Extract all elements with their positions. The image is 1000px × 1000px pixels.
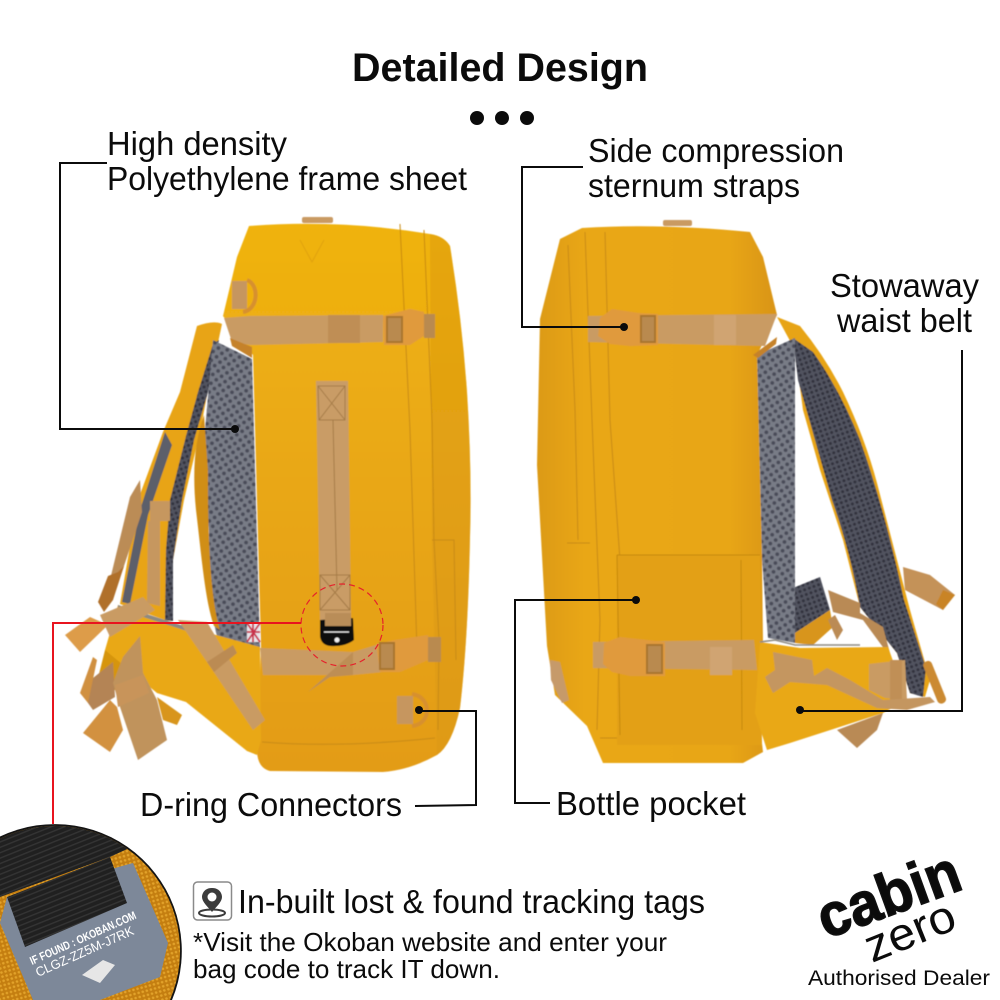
leader: sternum straps — [522, 167, 628, 331]
logo: cabin zero: cabin — [808, 838, 970, 951]
circular tracking tag close-up — [0, 824, 184, 1000]
label: sternum straps — [588, 132, 844, 204]
leader: d-ring — [415, 706, 476, 806]
stowed waist belt left — [65, 597, 265, 760]
back panel mesh left — [204, 340, 260, 650]
bottle pocket — [617, 555, 762, 745]
logo: cabin zero: zero — [856, 889, 963, 972]
upper buckle — [65, 617, 108, 652]
back label tag — [550, 660, 569, 703]
top carry tab right — [663, 220, 692, 226]
text: okoban instructions: *Visit the Okoban website and enter your — [193, 927, 667, 957]
icon: location pin in rounded frame — [194, 882, 232, 920]
lower buckle right — [603, 637, 665, 676]
back pad under strap right — [793, 577, 890, 748]
text: authorised dealer: Authorised Dealer — [808, 967, 990, 990]
back panel mesh right — [757, 338, 795, 643]
label: waist belt — [830, 267, 979, 339]
label: sternum straps: sternum straps — [588, 167, 800, 204]
shoulder side tab — [903, 567, 955, 610]
heading: lost and found: In-built lost & found tracking tags — [238, 883, 705, 920]
text: okoban instructions: bag code to track IT down. — [193, 954, 500, 984]
circular tracking tag close-up: CLGZ-ZZ5M-J7RK — [33, 923, 136, 980]
stowed waist belt right — [755, 640, 935, 750]
back strap and buckle — [88, 662, 115, 710]
leader: waist belt — [796, 350, 962, 714]
tracking tag black left — [320, 613, 354, 646]
label: waist belt: Stowaway — [830, 267, 979, 304]
top buckle right — [598, 309, 658, 346]
label: frame sheet: High density — [107, 125, 287, 162]
main body right — [537, 226, 777, 763]
label: waist belt: waist belt — [836, 302, 972, 339]
leader: bottle pocket — [515, 596, 640, 803]
lower compression strap left — [260, 635, 441, 692]
left backpack side view — [65, 217, 471, 772]
d-ring lower left — [397, 694, 427, 726]
wide strap — [178, 620, 265, 730]
label: frame sheet: Polyethylene frame sheet — [107, 160, 467, 197]
red connector line to tracking tag — [53, 623, 301, 824]
black strap — [7, 857, 127, 947]
dashed red highlight circle — [301, 584, 383, 666]
text: okoban instructions — [193, 927, 667, 984]
okoban diamond logo — [82, 960, 115, 983]
lower buckle left — [376, 635, 428, 672]
lower compression strap right — [593, 637, 757, 676]
top compression strap right — [588, 309, 777, 358]
main body left — [223, 224, 471, 772]
vertical handle left — [316, 381, 351, 620]
label: sternum straps: Side compression — [588, 132, 844, 169]
uk flag label — [247, 623, 260, 642]
right backpack side view — [537, 220, 955, 763]
title: Detailed Design — [352, 46, 648, 90]
label: d-ring: D-ring Connectors — [140, 786, 402, 823]
decorative three dots — [470, 111, 534, 125]
top carry tab left — [302, 217, 333, 223]
label: frame sheet — [107, 125, 467, 197]
label: bottle pocket: Bottle pocket — [556, 785, 746, 822]
d-ring upper left — [232, 280, 256, 312]
grey tag — [0, 863, 168, 1000]
leader: frame sheet — [60, 163, 239, 433]
lower buckle — [83, 700, 123, 752]
shoulder strap right — [777, 317, 955, 705]
top buckle left — [383, 309, 424, 345]
tag text: IF FOUND : OKOBAN.COM — [28, 910, 138, 968]
lower belt strap — [113, 636, 167, 760]
shoulder strap left — [98, 322, 222, 621]
top compression strap left — [224, 309, 435, 358]
